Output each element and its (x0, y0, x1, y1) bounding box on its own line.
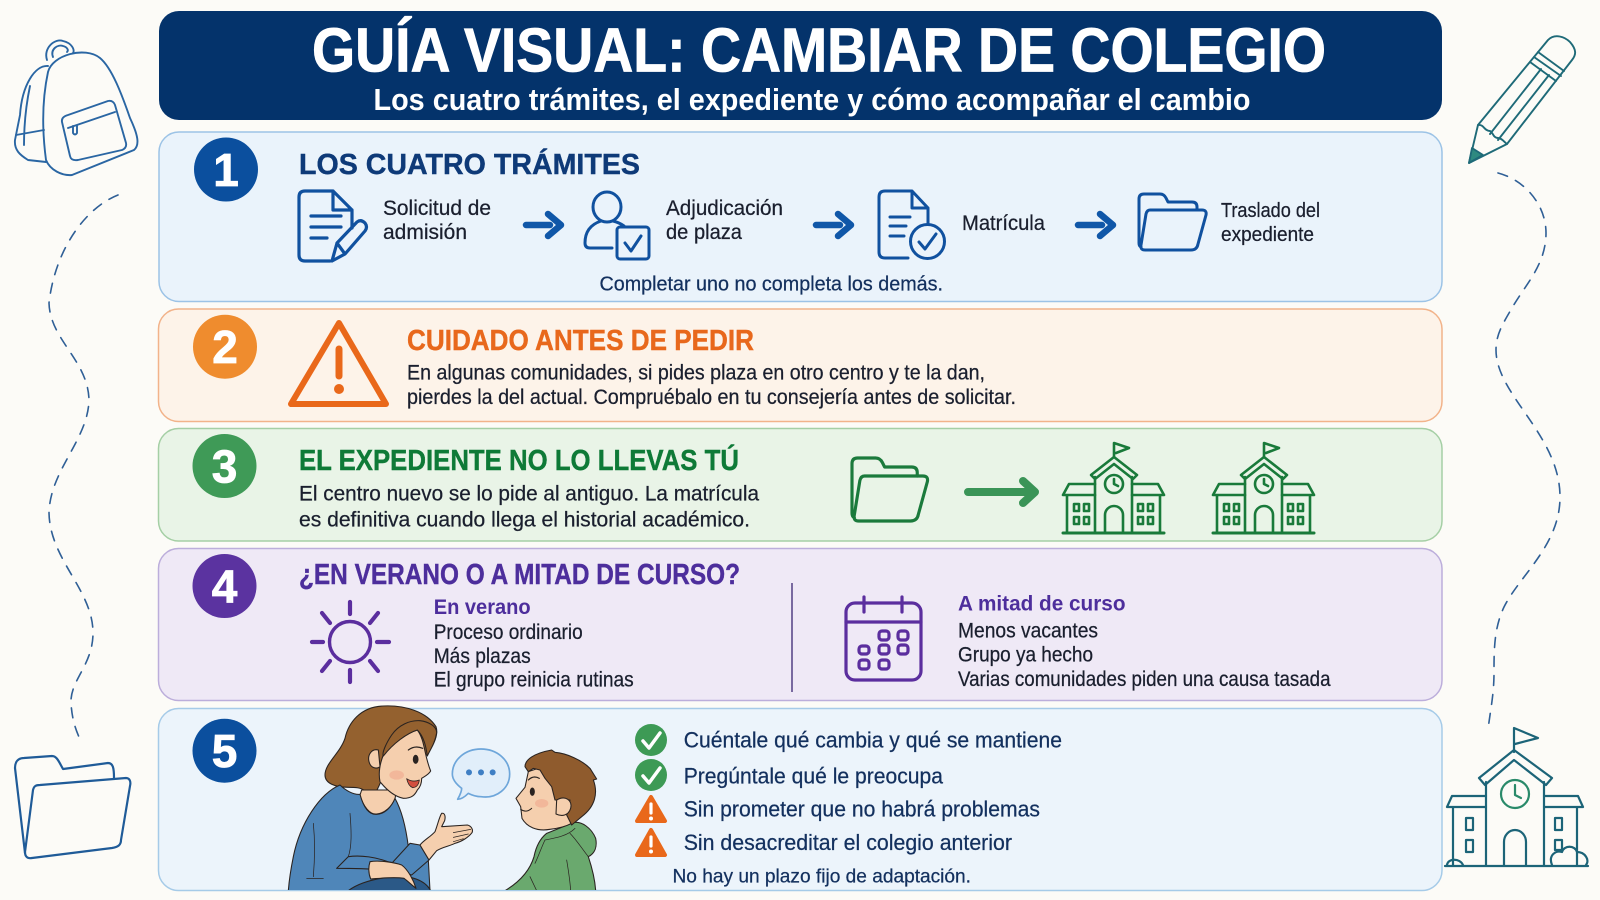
panel 5: cómo acompañar (158, 706, 1442, 891)
mother hair back (325, 706, 437, 794)
step label: adjudicación de plaza: Adjudicación (666, 197, 783, 220)
heading: EL EXPEDIENTE NO LO LLEVAS TÚ (299, 443, 739, 477)
icon: person with checkbox (585, 192, 649, 259)
bubble dots (466, 769, 496, 775)
decorative icon: pencil (1469, 36, 1575, 163)
number badge 5 (192, 719, 256, 783)
mother sleeve lines (307, 813, 393, 878)
item: Sin prometer que no habrá problemas (684, 797, 1040, 822)
boy hoodie (505, 822, 596, 891)
summer column: Proceso ordinario (434, 621, 583, 644)
decorative icon: backpack (15, 40, 137, 175)
arrow (1078, 214, 1113, 236)
subtitle: Los cuatro trámites, el expediente y cómo acompañar el cambio (374, 82, 1250, 117)
icon: school origin (1063, 443, 1164, 533)
mid-year column: Grupo ya hecho (958, 644, 1093, 666)
decorative dashed path: right (1488, 173, 1560, 730)
mother finger lines (453, 829, 471, 842)
warning text (407, 362, 1016, 409)
mother hand on knee (369, 861, 416, 888)
number badge 4 (192, 554, 256, 618)
mother brow (408, 747, 423, 750)
mother cheek (389, 770, 404, 780)
mid-year column: Menos vacantes (958, 620, 1098, 642)
panel 3: el expediente (158, 428, 1442, 541)
title: GUÍA VISUAL: CAMBIAR DE COLEGIO (312, 16, 1326, 86)
icon: application document with pencil (299, 191, 366, 261)
icon: green folder (852, 458, 928, 521)
mother neck (360, 790, 397, 814)
note: Completar uno no completa los demás. (600, 272, 943, 296)
step label: traslado del expediente: Traslado del (1221, 200, 1320, 222)
number badge 2 (193, 315, 257, 379)
icon: document with check (879, 191, 944, 258)
mother open hand (420, 813, 472, 860)
mid-year column: A mitad de curso (958, 592, 1126, 616)
heading: CUIDADO ANTES DE PEDIR (407, 325, 754, 357)
number badge 1: 1 (213, 144, 239, 196)
warning text: pierdes la del actual. Compruébalo en tu consejería antes de solicitar. (407, 386, 1016, 409)
body text: El centro nuevo se lo pide al antiguo. La matrícula (299, 482, 759, 506)
summer column: El grupo reinicia rutinas (434, 668, 634, 692)
mother fringe (383, 721, 437, 756)
step label: matrícula: Matrícula (962, 212, 1045, 235)
decorative dashed path: left (49, 195, 118, 737)
step label: solicitud de admisión: admisión (383, 221, 467, 244)
icon: sun (312, 602, 389, 682)
step label: solicitud de admisión: Solicitud de (383, 197, 491, 220)
item: Sin desacreditar el colegio anterior (684, 830, 1012, 855)
mother forearm (337, 843, 429, 875)
icon: warning (637, 830, 665, 855)
mother sweater (288, 785, 430, 891)
icon: warning triangle (291, 323, 386, 404)
illustration: mother and son talking (288, 706, 597, 891)
step label: traslado del expediente (1221, 200, 1320, 246)
mid-year column (958, 592, 1331, 691)
number badge 3: 3 (212, 440, 237, 492)
summer column: Más plazas (434, 645, 531, 668)
number badge 5: 5 (212, 725, 237, 777)
heading: LOS CUATRO TRÁMITES (299, 147, 640, 181)
icon: check (635, 724, 667, 756)
checklist (635, 724, 1062, 855)
icon: school destination (1213, 443, 1314, 533)
body text (299, 482, 759, 532)
item: Pregúntale qué le preocupa (684, 763, 944, 788)
step label: traslado del expediente: expediente (1221, 224, 1314, 246)
panel 1: los cuatro trámites (159, 132, 1442, 302)
panel 2: cuidado antes de pedir (158, 309, 1442, 422)
mother face (379, 730, 431, 798)
step label: adjudicación de plaza (666, 197, 783, 244)
mother ear (369, 750, 380, 768)
boy brow (528, 777, 539, 780)
boy hood and seams (530, 828, 588, 891)
step label: solicitud de admisión (383, 197, 491, 244)
icon: calendar (846, 597, 921, 680)
speech bubble (452, 749, 510, 799)
mother mouth (407, 779, 419, 788)
icon: check (635, 759, 667, 791)
arrow (526, 214, 561, 236)
item: Cuéntale qué cambia y qué se mantiene (684, 727, 1062, 752)
decorative icon: school right (1445, 728, 1588, 866)
boy hair (525, 750, 597, 825)
number badge 1 (194, 138, 258, 202)
boy eye (530, 788, 534, 795)
mother jeans (348, 876, 431, 891)
arrow (816, 214, 851, 236)
panel 4: en verano o a mitad de curso (158, 548, 1442, 700)
summer column (434, 595, 634, 692)
note: No hay un plazo fijo de adaptación. (672, 866, 971, 888)
decorative icon: folder left (15, 756, 130, 858)
heading: ¿EN VERANO O A MITAD DE CURSO? (299, 559, 740, 591)
warning text: En algunas comunidades, si pides plaza en otro centro y te la dan, (407, 362, 985, 384)
boy cheek (535, 799, 548, 808)
column divider (791, 583, 793, 692)
number badge 4: 4 (212, 560, 238, 612)
number badge 3 (192, 434, 256, 498)
body text: es definitiva cuando llega el historial académico. (299, 508, 750, 532)
header banner (159, 11, 1442, 120)
arrow: green (968, 481, 1035, 503)
boy smile (521, 808, 532, 811)
icon: folder (1139, 194, 1206, 250)
boy ear (556, 798, 571, 815)
number badge 2: 2 (212, 321, 238, 373)
boy face (516, 769, 571, 830)
mid-year column: Varias comunidades piden una causa tasada (958, 668, 1331, 691)
mother eye (413, 755, 418, 763)
summer column: En verano (434, 595, 531, 619)
step label: adjudicación de plaza: de plaza (666, 221, 742, 244)
icon: warning (637, 797, 665, 821)
